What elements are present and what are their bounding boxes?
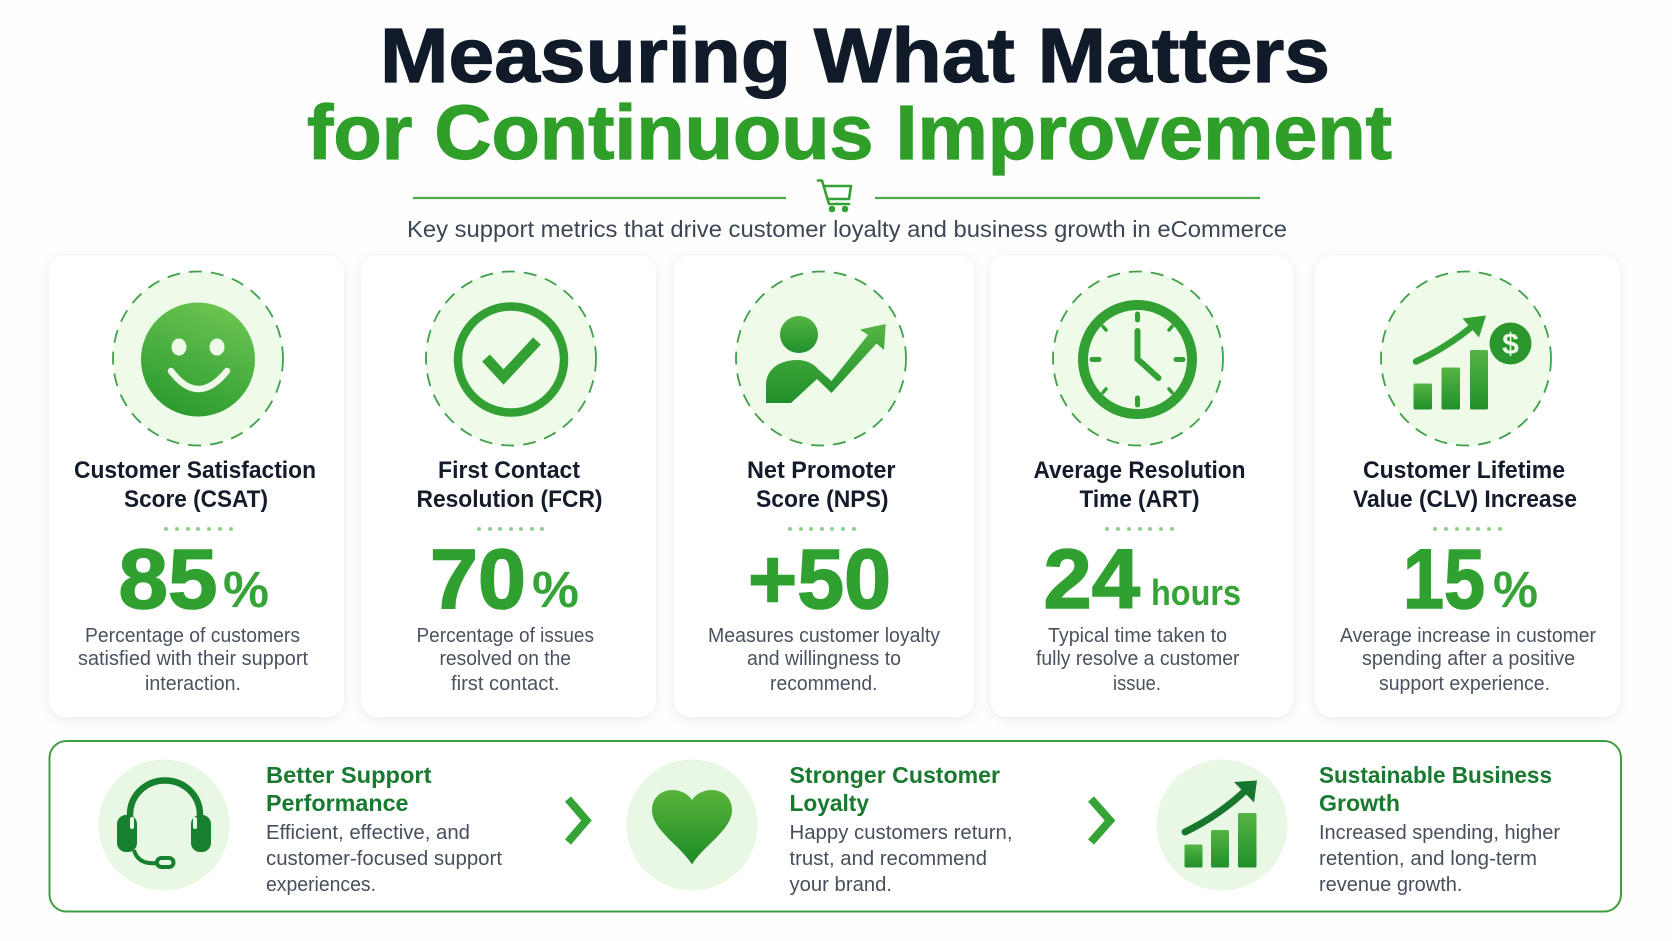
- subtitle: Key support metrics that drive customer loyalty and business growth in eCommerce: [407, 216, 1287, 242]
- arrow: chevron: [1091, 799, 1110, 842]
- outcome text: Increased spending, higher: [1319, 822, 1560, 844]
- metric value: %: [223, 561, 269, 618]
- description: first contact.: [451, 673, 560, 695]
- outcome text: [1319, 762, 1560, 896]
- metric title: [747, 457, 896, 513]
- arrow: chevron: [568, 799, 586, 842]
- outcome text: trust, and recommend: [790, 848, 987, 870]
- metric title: [74, 457, 316, 513]
- outcome text: [266, 762, 502, 896]
- metric title: Net Promoter: [747, 457, 896, 484]
- outcome text: [790, 762, 1012, 896]
- metric title: [1353, 457, 1577, 513]
- outcome text: Efficient, effective, and: [266, 822, 470, 844]
- description: Measures customer loyalty: [708, 625, 940, 647]
- outcome text: Happy customers return,: [790, 822, 1012, 844]
- metric title: Customer Satisfaction: [74, 457, 316, 484]
- icon: bars, arrow and dollar coin: [1414, 316, 1532, 410]
- description: Typical time taken to: [1048, 625, 1227, 647]
- metric title: Resolution (FCR): [416, 486, 602, 513]
- icon: growth chart: [1184, 780, 1257, 868]
- description: [78, 625, 308, 695]
- description: [708, 625, 940, 695]
- outcome text: Growth: [1319, 790, 1400, 816]
- metric value: 15: [1403, 532, 1485, 626]
- metric title: Score (CSAT): [124, 486, 268, 513]
- description: spending after a positive: [1362, 648, 1575, 670]
- description: Percentage of issues: [416, 625, 594, 647]
- outcome text: customer-focused support: [266, 848, 502, 870]
- metric title: Time (ART): [1080, 486, 1200, 513]
- metric title: Value (CLV) Increase: [1353, 486, 1577, 513]
- title: Measuring What Matters: [380, 13, 1330, 99]
- icon: shopping cart: [818, 180, 851, 211]
- description: [1036, 625, 1240, 695]
- metric value: hours: [1151, 572, 1241, 613]
- description: issue.: [1113, 673, 1161, 695]
- outcome text: experiences.: [266, 874, 376, 896]
- metric title: Customer Lifetime: [1363, 457, 1565, 484]
- icon: heart: [652, 790, 732, 864]
- description: [1340, 625, 1596, 695]
- icon: clock: [1083, 305, 1192, 414]
- panel: NPS: [674, 255, 974, 717]
- title: for Continuous Improvement: [307, 90, 1392, 176]
- title: [307, 13, 1392, 176]
- metric title: [1034, 457, 1246, 513]
- metric value: 24: [1044, 532, 1140, 626]
- description: and willingness to: [747, 648, 901, 670]
- outcome text: Performance: [266, 790, 408, 816]
- icon: person with rising arrow: [766, 316, 886, 403]
- outcome text: your brand.: [790, 874, 892, 896]
- outcome text: retention, and long-term: [1319, 848, 1537, 870]
- icon: bars, arrow and dollar coin: $: [1502, 328, 1519, 361]
- metric title: [416, 457, 602, 513]
- outcome: stronger customer loyalty: [626, 760, 1012, 896]
- icon: check circle: [458, 306, 564, 412]
- outcome: better support performance: [98, 760, 502, 896]
- icon: smiley: [141, 302, 255, 416]
- metric value: %: [1493, 561, 1538, 618]
- outcome text: Sustainable Business: [1319, 762, 1552, 788]
- metric title: Average Resolution: [1034, 457, 1246, 484]
- description: fully resolve a customer: [1036, 648, 1240, 670]
- metric value: 70: [430, 532, 526, 626]
- metric title: First Contact: [438, 457, 580, 484]
- description: support experience.: [1379, 673, 1550, 695]
- outcome text: Better Support: [266, 762, 432, 788]
- panel: CSAT: [49, 255, 344, 717]
- outcome text: Stronger Customer: [790, 762, 1000, 788]
- outcome text: revenue growth.: [1319, 874, 1462, 896]
- metric value: %: [532, 561, 579, 618]
- metric value: [1403, 532, 1538, 626]
- panel: CLV: [1315, 255, 1620, 717]
- metric title: Score (NPS): [756, 486, 888, 513]
- outcome text: Loyalty: [790, 790, 869, 816]
- description: [416, 625, 594, 695]
- metric value: 85: [118, 532, 218, 626]
- description: Percentage of customers: [85, 625, 300, 647]
- panel: outcomes strip: [50, 741, 1621, 912]
- panel: FCR: [361, 255, 656, 717]
- icon: headset: [117, 780, 211, 867]
- metric value: +50: [748, 532, 891, 626]
- description: recommend.: [770, 673, 878, 695]
- metric value: [1044, 532, 1241, 626]
- description: interaction.: [145, 673, 241, 695]
- description: satisfied with their support: [78, 648, 308, 670]
- description: resolved on the: [440, 648, 571, 670]
- metric value: [430, 532, 579, 626]
- outcome: sustainable business growth: [1156, 760, 1560, 896]
- panel: ART: [990, 255, 1293, 717]
- metric value: [118, 532, 269, 626]
- description: Average increase in customer: [1340, 625, 1596, 647]
